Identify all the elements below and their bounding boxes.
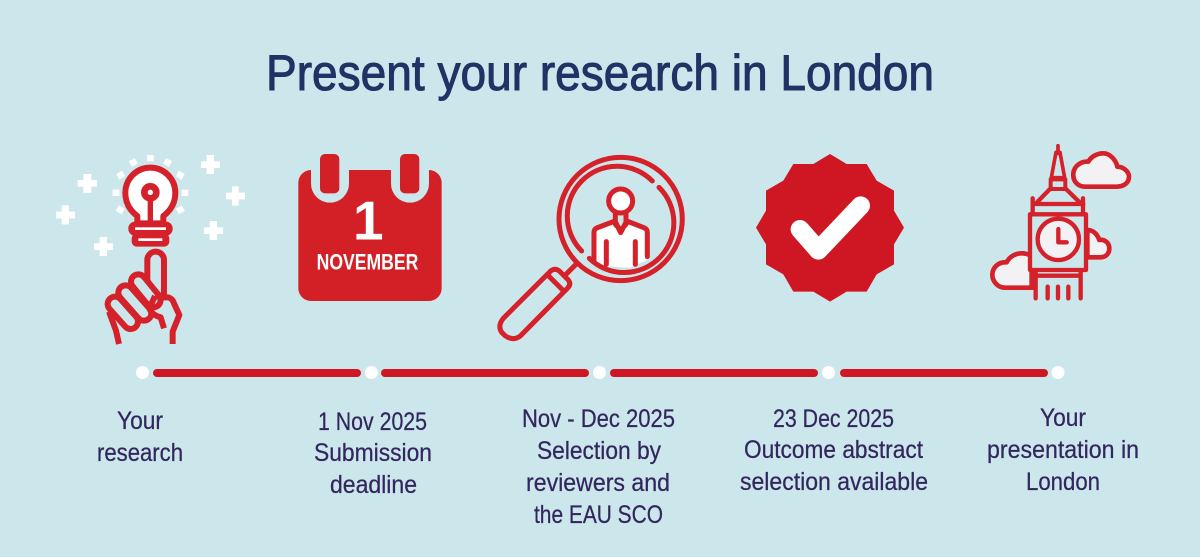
icon: light bulb and finger [56, 155, 245, 344]
icon: Big Ben tower and clouds [992, 146, 1129, 298]
title: Present your research in London [266, 45, 934, 101]
person [594, 189, 647, 268]
label: your presentation in London: Your [1040, 404, 1086, 432]
label: outcome abstract selection: 23 Dec 2025 [773, 405, 894, 433]
label: submission deadline: 1 Nov 2025 [318, 408, 427, 436]
label: outcome abstract selection: selection available [740, 468, 928, 496]
cloud top [1073, 153, 1129, 187]
icon: hand [109, 252, 179, 344]
label: outcome abstract selection [740, 405, 928, 496]
label: outcome abstract selection: Outcome abstract [744, 436, 923, 464]
label: selection by reviewers: Nov - Dec 2025 [522, 405, 675, 433]
label: submission deadline: deadline [330, 471, 417, 499]
icon: bulb [125, 168, 175, 247]
icon: magnifying glass with person [500, 157, 682, 339]
cloud left [992, 253, 1033, 288]
label: your presentation in London: presentation in [987, 436, 1139, 464]
calendar day number: 1 [353, 190, 384, 252]
label: selection by reviewers: reviewers and [526, 469, 670, 497]
label: your research: research [97, 439, 183, 467]
timeline [136, 366, 1064, 379]
label: your presentation in London [987, 404, 1139, 496]
label: selection by reviewers: Selection by [537, 437, 661, 465]
label: your research [97, 407, 183, 467]
label: selection by reviewers: the EAU SCO [534, 501, 663, 529]
calendar month: NOVEMBER [317, 250, 418, 275]
label: your presentation in London: London [1026, 468, 1100, 496]
icon: calendar [298, 154, 442, 301]
label: submission deadline [314, 408, 432, 499]
label: selection by reviewers [522, 405, 675, 529]
icon: sparkles and plus signs [56, 155, 245, 256]
icon: approval badge with check mark [756, 154, 904, 302]
label: submission deadline: Submission [314, 439, 432, 467]
label: your research: Your [117, 407, 163, 435]
tower [1030, 146, 1086, 298]
cloud right [1087, 230, 1109, 257]
